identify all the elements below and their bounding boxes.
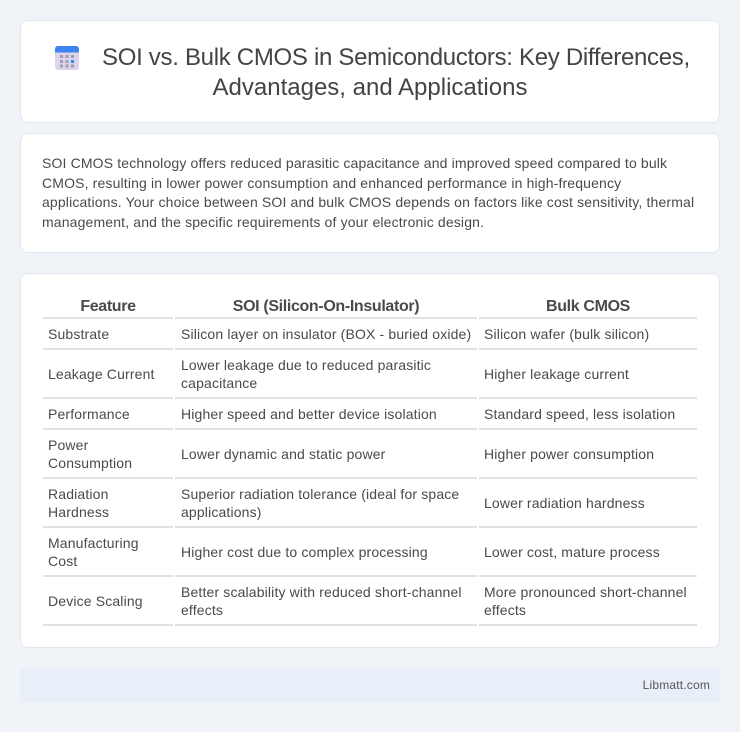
row: Leakage Current: Lower leakage due to reduced parasitic	[181, 357, 431, 373]
title: SOI vs. Bulk CMOS in Semiconductors: Key Differences,	[102, 44, 690, 71]
icon: calendar grid	[55, 46, 79, 70]
row: Power Consumption: Consumption	[48, 455, 132, 471]
panel: title card	[20, 20, 720, 123]
panel: comparison table	[20, 273, 720, 648]
row: Device Scaling: Device Scaling	[48, 593, 143, 609]
row: Power Consumption: Higher power consumption	[484, 446, 654, 462]
row: Power Consumption: Lower dynamic and static power	[181, 446, 386, 462]
title: Advantages, and Applications	[213, 74, 527, 101]
row: Substrate: Substrate	[48, 326, 109, 342]
row: Device Scaling: Better scalability with reduced short-channel	[181, 584, 462, 600]
row: Manufacturing Cost: Lower cost, mature process	[484, 544, 660, 560]
summary text: applications. Your choice between SOI and bulk CMOS depends on factors like cost sensitivity, thermal	[42, 194, 694, 210]
row: Power Consumption: Power	[48, 437, 88, 453]
row: Device Scaling: More pronounced short-channel	[484, 584, 687, 600]
row: Radiation Hardness: applications)	[181, 504, 262, 520]
row: Device Scaling	[48, 584, 687, 618]
row: Radiation Hardness: Lower radiation hardness	[484, 495, 645, 511]
row: Device Scaling: effects	[484, 602, 526, 618]
footer bar	[20, 668, 720, 702]
row: Substrate	[48, 326, 649, 342]
row: Manufacturing Cost	[48, 535, 660, 569]
summary text: SOI CMOS technology offers reduced parasitic capacitance and improved speed compared to bulk	[42, 155, 667, 171]
table header	[80, 298, 630, 315]
row: Device Scaling: effects	[181, 602, 223, 618]
summary text: management, and the specific requirements of your electronic design.	[42, 214, 484, 230]
row: Performance	[48, 406, 675, 422]
row: Manufacturing Cost: Cost	[48, 553, 77, 569]
footer text: Libmatt.com	[643, 678, 710, 692]
row: Substrate: Silicon layer on insulator (BOX - buried oxide)	[181, 326, 471, 342]
row: Manufacturing Cost: Higher cost due to complex processing	[181, 544, 428, 560]
row: Radiation Hardness	[48, 486, 645, 520]
row: Radiation Hardness: Hardness	[48, 504, 109, 520]
summary text	[42, 155, 694, 230]
panel: summary card	[20, 133, 720, 253]
table header: SOI (Silicon-On-Insulator)	[233, 298, 419, 315]
summary text: CMOS, resulting in lower power consumption and enhanced performance in high-frequency	[42, 174, 621, 190]
table header: Bulk CMOS	[546, 298, 630, 315]
row: Leakage Current: Higher leakage current	[484, 366, 629, 382]
title	[102, 44, 690, 101]
row: Manufacturing Cost: Manufacturing	[48, 535, 139, 551]
row: Leakage Current: Leakage Current	[48, 366, 155, 382]
row: Leakage Current	[48, 357, 629, 391]
row: Radiation Hardness: Radiation	[48, 486, 109, 502]
row: Leakage Current: capacitance	[181, 375, 257, 391]
row: Performance: Performance	[48, 406, 130, 422]
table header: Feature	[80, 298, 136, 315]
row: Performance: Higher speed and better device isolation	[181, 406, 437, 422]
row: Substrate: Silicon wafer (bulk silicon)	[484, 326, 649, 342]
row: Power Consumption	[48, 437, 654, 471]
row: Radiation Hardness: Superior radiation tolerance (ideal for space	[181, 486, 459, 502]
row: Performance: Standard speed, less isolation	[484, 406, 675, 422]
